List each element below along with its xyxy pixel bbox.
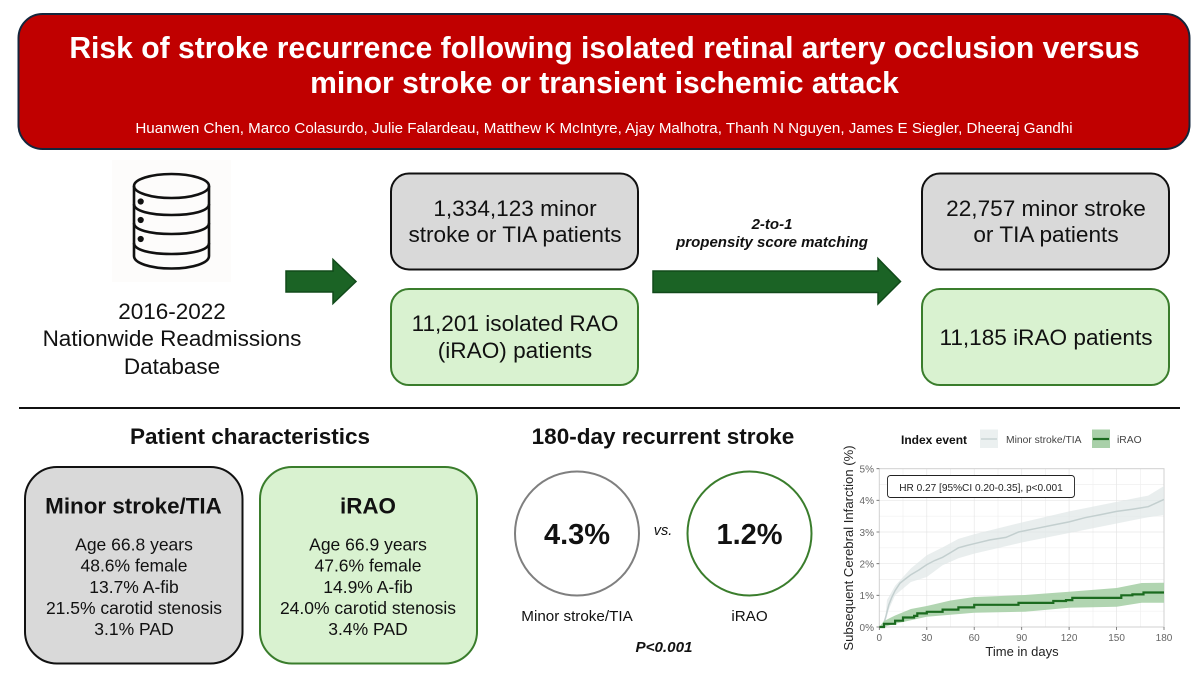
line: iRAO [879, 592, 1164, 627]
y axis: 4% [860, 496, 874, 507]
panel: minor stroke characteristics: 48.6% female [80, 556, 188, 576]
data source label [43, 299, 301, 379]
box: unmatched iRAO cohort: (iRAO) patients [438, 338, 592, 363]
heading: patient characteristics: Patient characteristics [130, 424, 370, 449]
box: unmatched iRAO cohort [391, 289, 638, 385]
data source label: 2016-2022 [118, 299, 226, 324]
panel: iRAO characteristics: iRAO [340, 494, 396, 518]
x axis: 30 [921, 633, 933, 644]
legend [901, 430, 1142, 448]
x axis: 120 [1061, 633, 1078, 644]
x axis: 0 [877, 633, 883, 644]
title: Risk of stroke recurrence following isolated retinal artery occlusion versus [69, 32, 1140, 65]
panel: minor stroke characteristics: Minor stroke/TIA [45, 494, 222, 518]
panel: iRAO characteristics: 3.4% PAD [328, 619, 408, 639]
x axis [877, 627, 1173, 644]
y axis [860, 464, 879, 634]
panel: minor stroke characteristics: Age 66.8 years [75, 534, 193, 554]
box: matched minor stroke cohort: or TIA patients [973, 222, 1119, 247]
box: unmatched minor stroke cohort: stroke or TIA patients [408, 222, 622, 247]
circle: minor stroke rate: 4.3% [544, 519, 610, 551]
panel: iRAO characteristics: 24.0% carotid stenosis [280, 598, 456, 618]
panel: minor stroke characteristics: 3.1% PAD [94, 619, 174, 639]
line: minor stroke [879, 499, 1164, 627]
legend: Minor stroke/TIA [1006, 435, 1082, 446]
chart: cumulative incidence [841, 430, 1173, 659]
box: unmatched minor stroke cohort: 1,334,123 minor [433, 196, 597, 221]
matching label: propensity score matching [675, 234, 868, 251]
circle: minor stroke rate: Minor stroke/TIA [521, 608, 634, 625]
band: minor stroke confidence interval [882, 486, 1164, 627]
x axis: 180 [1156, 633, 1173, 644]
legend: iRAO [1117, 435, 1142, 446]
title banner [18, 14, 1190, 149]
y axis: 5% [860, 464, 874, 476]
icon: database [112, 160, 231, 282]
circle: iRAO rate: 1.2% [716, 519, 783, 551]
box: matched minor stroke cohort [922, 174, 1169, 270]
circle: iRAO rate [688, 472, 812, 625]
matching label [675, 216, 868, 251]
vs label: vs. [654, 523, 672, 539]
panel: iRAO characteristics [260, 467, 477, 664]
box: matched iRAO cohort [922, 289, 1169, 385]
annotation: hazard ratio: HR 0.27 [95%CI 0.20-0.35], p<0.001 [899, 483, 1063, 494]
panel: iRAO characteristics: Age 66.9 years [309, 534, 427, 554]
box: unmatched minor stroke cohort [391, 174, 638, 270]
arrow: matching [653, 258, 900, 304]
y axis: 3% [860, 528, 874, 539]
y axis title: Subsequent Cerebral Infarction (%) [841, 445, 856, 651]
box: matched minor stroke cohort: 22,757 minor stroke [946, 196, 1146, 221]
box: matched iRAO cohort: 11,185 iRAO patients [939, 325, 1153, 350]
legend: Index event [901, 433, 967, 447]
box: unmatched iRAO cohort: 11,201 isolated RAO [412, 311, 618, 336]
panel: minor stroke characteristics: 21.5% carotid stenosis [46, 598, 222, 618]
arrow: database to cohorts [286, 260, 356, 304]
y axis: 1% [860, 591, 874, 602]
band: iRAO confidence interval [879, 583, 1164, 627]
plot grid [879, 469, 1164, 627]
authors: Huanwen Chen, Marco Colasurdo, Julie Falardeau, Matthew K McIntyre, Ajay Malhotra, Thanh N Nguyen, James E Siegler, Dheeraj Gandhi [135, 120, 1073, 137]
x axis title: Time in days [985, 644, 1059, 659]
heading: 180-day recurrent stroke: 180-day recurrent stroke [532, 424, 794, 449]
data source label: Database [124, 354, 220, 379]
panel: iRAO characteristics: 14.9% A-fib [323, 577, 413, 597]
p value: P<0.001 [635, 639, 693, 656]
data source label: Nationwide Readmissions [43, 326, 301, 351]
circle: minor stroke rate [515, 472, 639, 625]
annotation: hazard ratio [888, 476, 1074, 498]
x axis: 60 [969, 633, 980, 644]
x axis: 150 [1108, 633, 1125, 644]
matching label: 2-to-1 [751, 216, 792, 233]
circle: iRAO rate: iRAO [731, 608, 768, 625]
y axis: 2% [860, 560, 874, 570]
y axis: 0% [860, 623, 874, 634]
x axis: 90 [1016, 633, 1028, 644]
panel: minor stroke characteristics: 13.7% A-fib [89, 577, 179, 597]
panel: iRAO characteristics: 47.6% female [314, 556, 422, 576]
title second line: minor stroke or transient ischemic attack [310, 67, 899, 100]
panel: minor stroke characteristics [25, 467, 242, 664]
